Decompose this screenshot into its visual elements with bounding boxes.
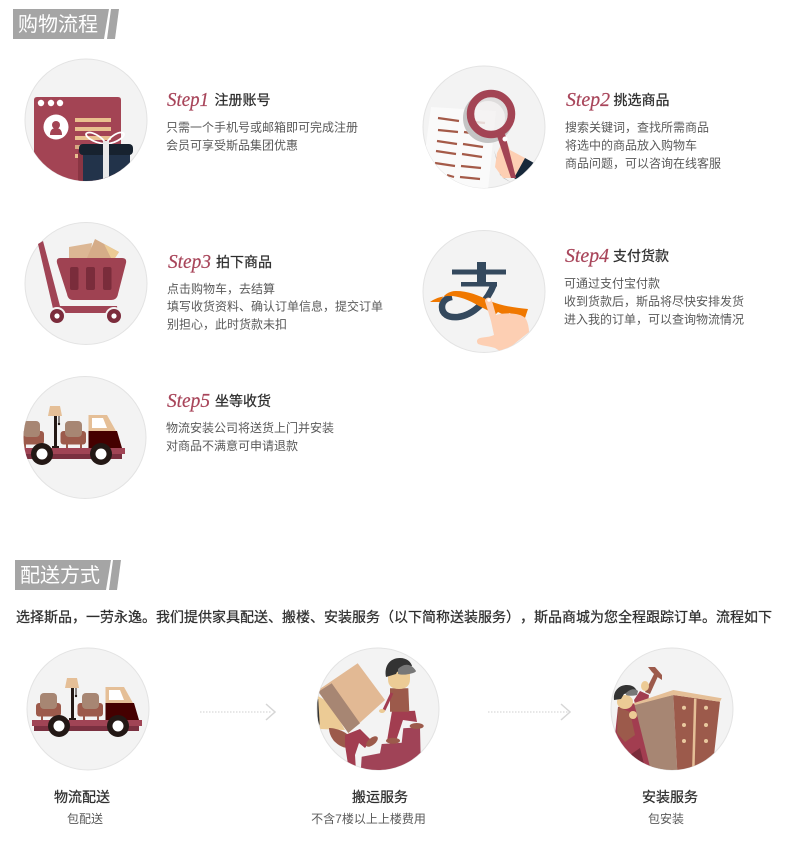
icon: delivery truck: [15, 376, 146, 498]
step 1 text: 只需一个手机号或邮箱即可完成注册: [166, 120, 358, 134]
panel: step 2: [420, 66, 721, 190]
step 5 text: [166, 420, 334, 453]
step 4 text: 进入我的订单，可以查询物流情况: [564, 312, 744, 326]
label: installation: 包安装: [648, 811, 684, 826]
step 1 text: [166, 120, 358, 152]
step 3 text: 填写收货资料、确认订单信息，提交订单: [167, 298, 383, 314]
step 1 title: Step1: [167, 89, 209, 111]
step 3 text: 别担心，此时货款未扣: [167, 316, 287, 332]
arrow 1: [200, 704, 275, 720]
panel: logistics delivery: [27, 648, 149, 826]
arrow 2: [488, 704, 570, 720]
step 2 text: 搜索关键词，查找所需商品: [565, 120, 709, 134]
label: logistics: [54, 789, 110, 826]
step 5 text: 物流安装公司将送货上门并安装: [166, 420, 334, 435]
icon: shopping cart: [25, 222, 147, 344]
panel: step 5: [15, 376, 334, 498]
step 5 title: [167, 390, 271, 412]
panel: step 1: [25, 59, 358, 190]
panel: installation service: [611, 648, 733, 826]
panel: step 4: [423, 230, 744, 353]
step 3 title: Step3: [168, 251, 211, 273]
intro text: 选择斯品，一劳永逸。我们提供家具配送、搬楼、安装服务（以下简称送装服务），斯品商城为您全程跟踪订单。流程如下: [16, 609, 772, 625]
label: installation: [642, 789, 698, 826]
heading: 配送方式: 配送方式: [20, 564, 100, 587]
step 5 title: Step5: [167, 390, 210, 412]
step 4 text: 收到货款后，斯品将尽快安排发货: [564, 294, 744, 308]
panel: step 3: [25, 222, 383, 344]
icon: movers carrying box upstairs: [317, 648, 439, 772]
step 3 title: [168, 251, 272, 273]
step 3 title: 拍下商品: [216, 254, 272, 270]
heading: 购物流程: 购物流程: [18, 13, 98, 36]
icon: register page with gift: [25, 59, 147, 190]
icon: worker assembling wardrobe: [611, 648, 733, 772]
icon: alipay with hand: [423, 230, 545, 353]
step 1 title: 注册账号: [214, 92, 270, 108]
step 2 text: [565, 120, 721, 170]
label: logistics: 包配送: [67, 811, 103, 826]
label: installation: 安装服务: [642, 789, 698, 805]
step 4 title: [565, 245, 669, 267]
label: logistics: 物流配送: [54, 789, 110, 805]
step 3 text: 点击购物车，去结算: [167, 281, 275, 296]
step 5 text: 对商品不满意可申请退款: [166, 438, 298, 453]
step 2 title: Step2: [566, 89, 610, 111]
icon: delivery truck: [27, 648, 149, 770]
heading: 配送方式: [15, 560, 121, 590]
step 4 title: 支付货款: [613, 248, 669, 264]
step 2 title: [566, 89, 670, 111]
step 1 title: [167, 89, 270, 111]
label: carrying: 不含7楼以上上楼费用: [311, 811, 426, 826]
step 2 title: 挑选商品: [614, 92, 670, 108]
step 4 text: [564, 276, 744, 326]
step 2 text: 将选中的商品放入购物车: [565, 138, 697, 152]
icon: magnifier over list: [420, 66, 545, 190]
label: carrying: [311, 789, 426, 826]
label: carrying: 搬运服务: [352, 789, 408, 805]
step 1 text: 会员可享受斯品集团优惠: [166, 138, 298, 152]
step 5 title: 坐等收货: [215, 393, 271, 409]
heading: 购物流程: [13, 9, 119, 39]
step 4 text: 可通过支付宝付款: [564, 276, 660, 290]
step 2 text: 商品问题，可以咨询在线客服: [565, 156, 721, 170]
step 3 text: [167, 281, 383, 332]
step 4 title: Step4: [565, 245, 609, 267]
panel: carrying service: [311, 648, 439, 826]
